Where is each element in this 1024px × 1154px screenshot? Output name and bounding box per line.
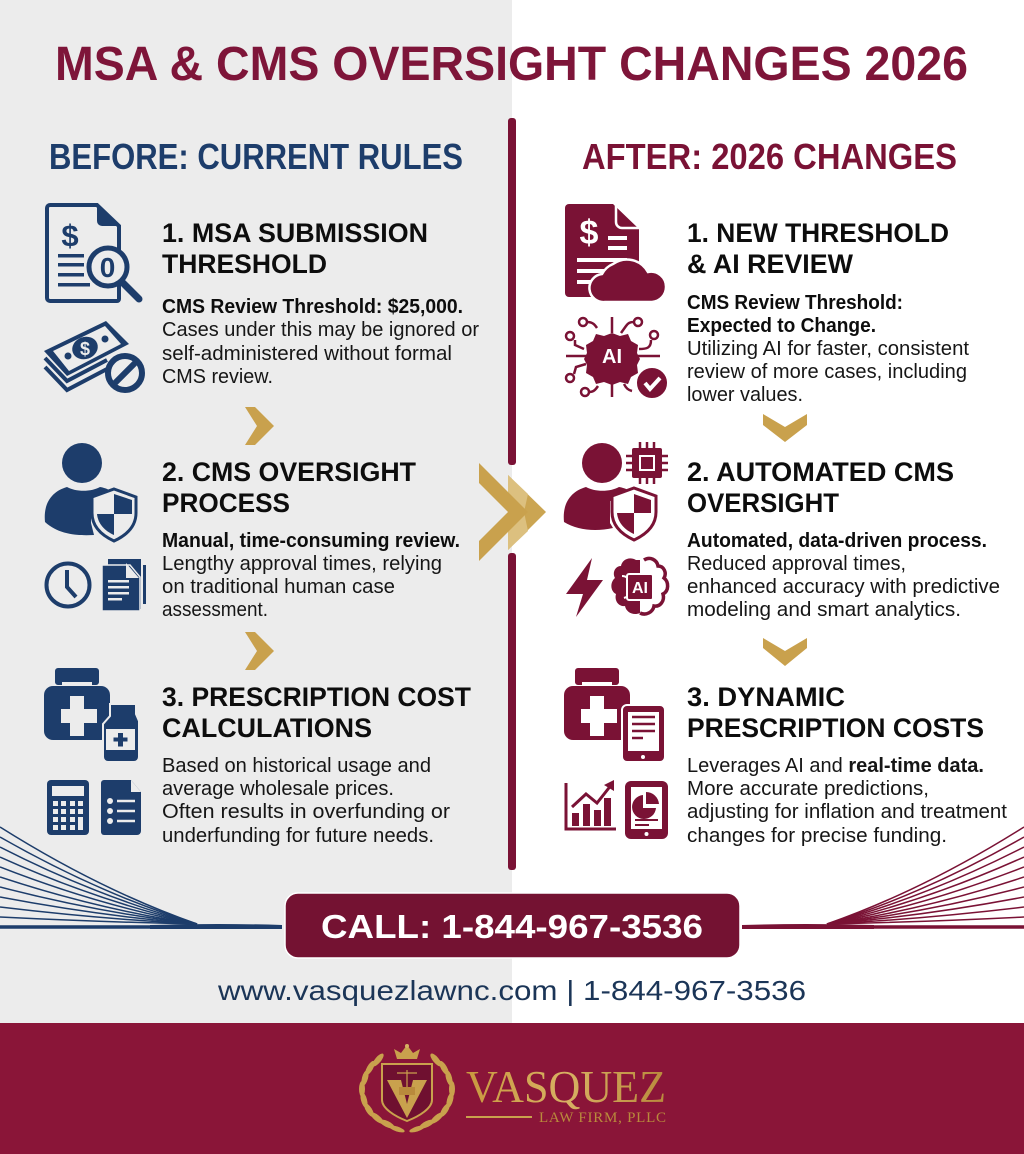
icon: document with magnifier	[47, 205, 139, 301]
step 2 heading: 2. AUTOMATED CMS	[687, 457, 954, 487]
step 2 text: modeling and smart analytics.	[687, 599, 961, 621]
decorative wave: right	[742, 827, 1024, 929]
step 1 text: Utilizing AI for faster, consistent	[687, 338, 969, 360]
step 1 text: Cases under this may be ignored or	[162, 319, 479, 341]
step 3 text	[162, 755, 450, 847]
step 1 text: lower values.	[687, 384, 803, 406]
step 3 text: More accurate predictions,	[687, 778, 929, 800]
icon: medical kit and bottle	[44, 668, 139, 762]
step 3 text: underfunding for future needs.	[162, 825, 434, 847]
step 2 text: Automated, data-driven process.	[687, 530, 987, 552]
large center arrow	[479, 463, 546, 561]
step 2 text: on traditional human case	[162, 576, 395, 598]
decorative wave: left	[0, 827, 282, 929]
icon: lightning and AI brain: AI	[632, 580, 648, 597]
step 2 text: assessment.	[162, 599, 268, 621]
step 3 heading: CALCULATIONS	[162, 713, 372, 743]
step 1 text: self-administered without formal	[162, 343, 452, 365]
step 1 heading: 1. MSA SUBMISSION	[162, 218, 428, 248]
panel: before	[44, 205, 479, 847]
arrow	[245, 632, 274, 670]
step 2 heading: OVERSIGHT	[687, 488, 839, 518]
call button: CALL: 1-844-967-3536	[321, 908, 703, 945]
step 1 heading	[162, 218, 428, 279]
website and phone: www.vasquezlawnc.com | 1-844-967-3536	[217, 975, 806, 1006]
step 1 heading: THRESHOLD	[162, 249, 327, 279]
icon: person, chip and shield	[564, 442, 668, 540]
step 3 heading	[687, 682, 984, 743]
step 3 text: Based on historical usage and	[162, 755, 431, 777]
step 3 heading: 3. DYNAMIC	[687, 682, 845, 712]
step 3 text: average wholesale prices.	[162, 778, 394, 800]
logo wordmark: LAW FIRM, PLLC	[539, 1110, 666, 1126]
step 3 text: Leverages AI and real-time data.	[687, 755, 984, 777]
arrow	[763, 414, 807, 442]
step 3 text: changes for precise funding.	[687, 825, 947, 847]
icon: medical kit and tablet	[564, 668, 665, 762]
step 3 heading: PRESCRIPTION COSTS	[687, 713, 984, 743]
heading: after: AFTER: 2026 CHANGES	[582, 136, 957, 177]
title: MSA & CMS OVERSIGHT CHANGES 2026	[55, 38, 968, 91]
call button	[285, 893, 740, 958]
step 2 heading: 2. CMS OVERSIGHT	[162, 457, 416, 487]
step 1 text: Expected to Change.	[687, 315, 876, 337]
logo crest	[359, 1044, 455, 1134]
icon: clock and documents	[46, 559, 146, 611]
icon: growth chart and tablet	[566, 780, 668, 839]
step 2 text	[687, 530, 1000, 621]
step 1 heading	[687, 218, 949, 279]
icon: AI chip with check	[566, 317, 668, 399]
icon: cash with prohibition sign: $	[80, 339, 90, 359]
step 2 heading: PROCESS	[162, 488, 290, 518]
icon: AI chip with check: AI	[602, 346, 622, 368]
step 3 heading	[162, 682, 471, 743]
heading: before: BEFORE: CURRENT RULES	[49, 136, 463, 177]
step 2 text: Lengthy approval times, relying	[162, 553, 442, 575]
icon: document with magnifier: 0	[100, 252, 115, 283]
icon: document with magnifier: $	[61, 218, 79, 253]
arrow	[245, 407, 274, 445]
step 1 heading: & AI REVIEW	[687, 249, 854, 279]
step 1 text: review of more cases, including	[687, 361, 967, 383]
step 2 heading	[162, 457, 416, 518]
step 3 text: Often results in overfunding or	[162, 801, 450, 823]
step 1 text: CMS review.	[162, 366, 273, 388]
panel: after	[564, 204, 1007, 847]
icon: calculator and checklist	[47, 780, 141, 835]
step 2 text	[162, 530, 460, 621]
step 1 heading: 1. NEW THRESHOLD	[687, 218, 949, 248]
step 1 text	[162, 296, 479, 388]
center divider	[508, 118, 516, 870]
step 2 text: enhanced accuracy with predictive	[687, 576, 1000, 598]
step 1 text: CMS Review Threshold: $25,000.	[162, 296, 463, 318]
icon: document with cloud	[565, 204, 666, 302]
footer band	[0, 1023, 1024, 1154]
icon: document with cloud: $	[580, 214, 599, 252]
step 3 text: adjusting for inflation and treatment	[687, 801, 1007, 823]
icon: cash with prohibition sign	[44, 321, 142, 390]
icon: person with shield	[45, 443, 136, 541]
step 2 text: Manual, time-consuming review.	[162, 530, 460, 552]
step 1 text	[687, 292, 969, 406]
step 2 text: Reduced approval times,	[687, 553, 906, 575]
logo wordmark: VASQUEZ	[466, 1061, 666, 1112]
step 1 text: CMS Review Threshold:	[687, 292, 903, 314]
step 3 heading: 3. PRESCRIPTION COST	[162, 682, 471, 712]
arrow	[763, 638, 807, 666]
step 3 text	[687, 755, 1007, 847]
step 2 heading	[687, 457, 954, 518]
icon: lightning and AI brain	[566, 558, 668, 617]
